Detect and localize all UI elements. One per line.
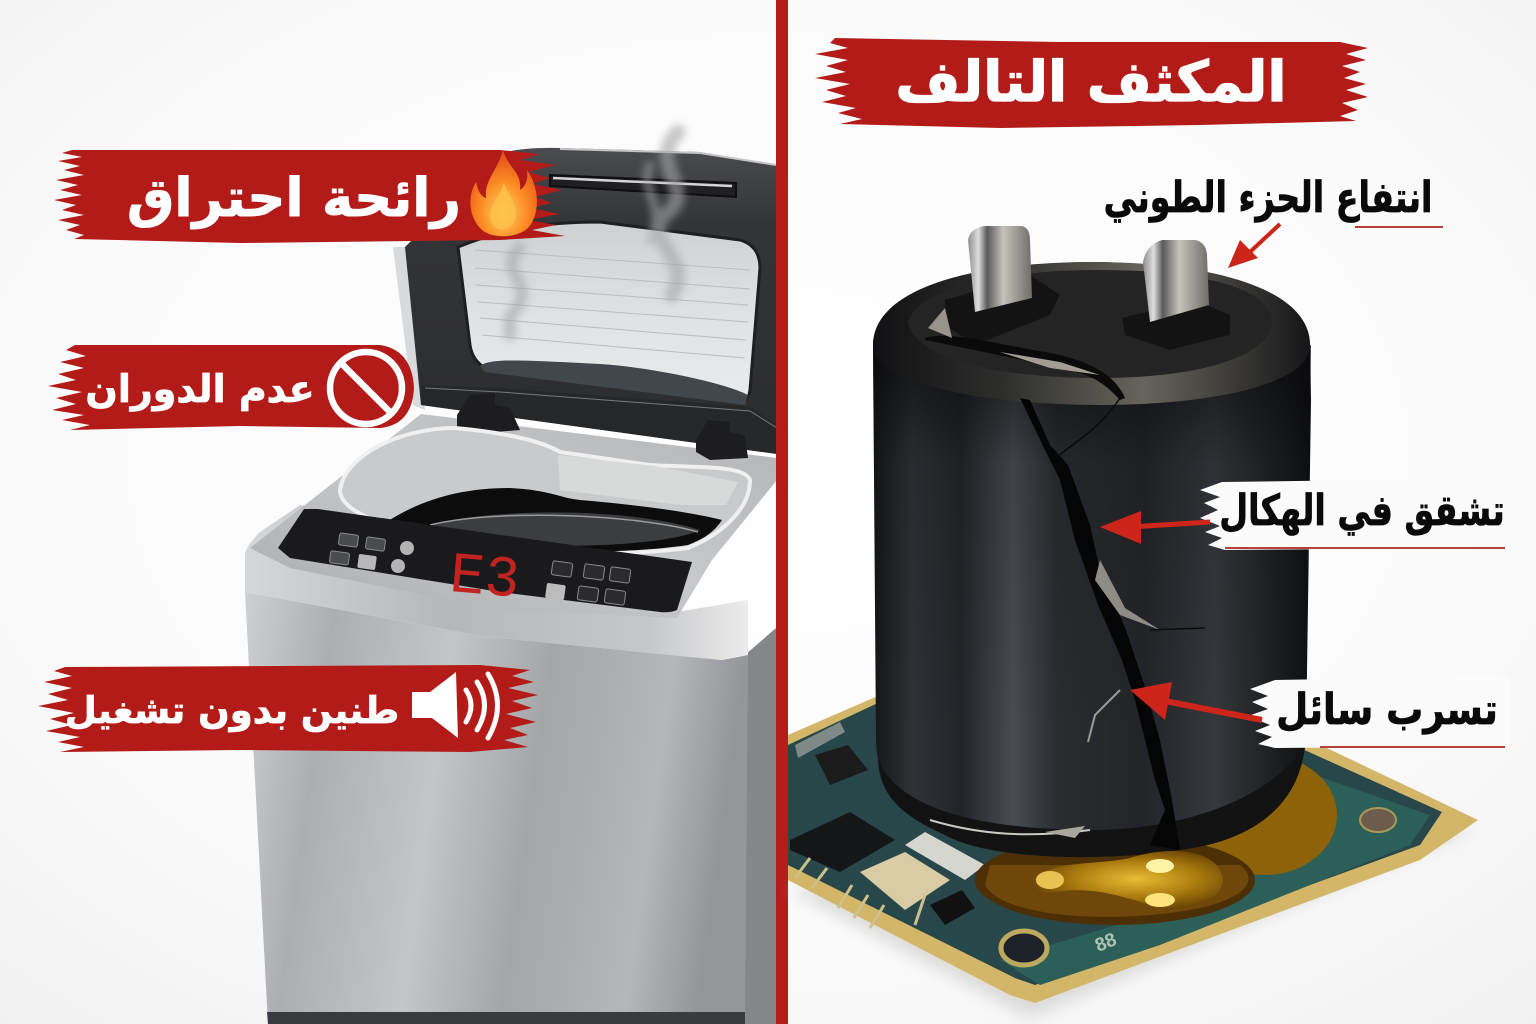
capacitor with PCB [788, 226, 1478, 1018]
oil leak [1030, 851, 1223, 907]
washing machine [245, 148, 777, 1024]
pcb hole [1001, 931, 1047, 965]
bottom band [878, 745, 1305, 857]
main crack [1020, 398, 1180, 850]
underline [1320, 746, 1505, 748]
title banner [815, 38, 1368, 128]
title text: المكثف التالف [895, 50, 1287, 115]
window lines [475, 250, 750, 358]
right buttons [551, 561, 631, 605]
lid window [458, 222, 760, 402]
drum [385, 488, 722, 552]
oil puddle behind [1193, 755, 1337, 875]
top deck [250, 414, 777, 618]
pcb shadow [788, 800, 1470, 1018]
arrow [1228, 224, 1280, 268]
left buttons [329, 533, 386, 565]
callout: top swelling [1104, 174, 1443, 268]
tub opening [340, 428, 750, 553]
terminal right [1143, 240, 1209, 322]
icon: flame [470, 150, 537, 236]
top rim [873, 262, 1310, 405]
label: no rotation: عدم الدوران [85, 367, 315, 412]
label background [1248, 676, 1510, 748]
lid [393, 148, 777, 454]
drum ring [415, 512, 700, 546]
machine front body [245, 592, 748, 1024]
chips [790, 722, 985, 928]
top recess [908, 270, 1272, 378]
tub right recess [558, 455, 738, 505]
red divider [776, 0, 788, 1024]
pcb [788, 695, 1478, 1003]
arrow [1100, 511, 1210, 544]
front lip [245, 505, 748, 660]
icon: prohibited [330, 352, 402, 424]
capacitor body [873, 262, 1311, 857]
label: humming: طنين بدون تشغيل [65, 689, 399, 732]
underline [1225, 547, 1505, 549]
crack on top [925, 336, 1125, 400]
callout: body crack [1100, 478, 1510, 550]
banner: burning smell [54, 150, 565, 243]
callout: liquid leak [1130, 676, 1510, 748]
label: top swelling: انتفاع الحزء الطوني [1104, 174, 1432, 223]
arrow [1130, 682, 1262, 720]
lower window plate [480, 360, 748, 405]
icon: speaker [412, 672, 498, 738]
hinges [457, 393, 748, 460]
terminal seats [945, 275, 1060, 345]
E3 display: E3 [447, 544, 522, 615]
smoke [509, 132, 678, 335]
banner: no rotation [48, 345, 414, 430]
label: body crack: تشقق في الهكال [1219, 487, 1505, 536]
underline [1355, 226, 1443, 228]
side panel [745, 628, 776, 1024]
label: liquid leak: تسرب سائل [1276, 686, 1498, 735]
control panel [278, 509, 692, 615]
lid handle [550, 175, 736, 197]
base strip [267, 1012, 745, 1024]
pcb marking: 88 [1092, 929, 1120, 957]
label: burning smell: رائحة احتراق [127, 168, 461, 229]
lid lower bar [421, 385, 777, 454]
terminal left [968, 226, 1032, 312]
label background [1200, 478, 1510, 550]
banner: humming [38, 665, 538, 752]
